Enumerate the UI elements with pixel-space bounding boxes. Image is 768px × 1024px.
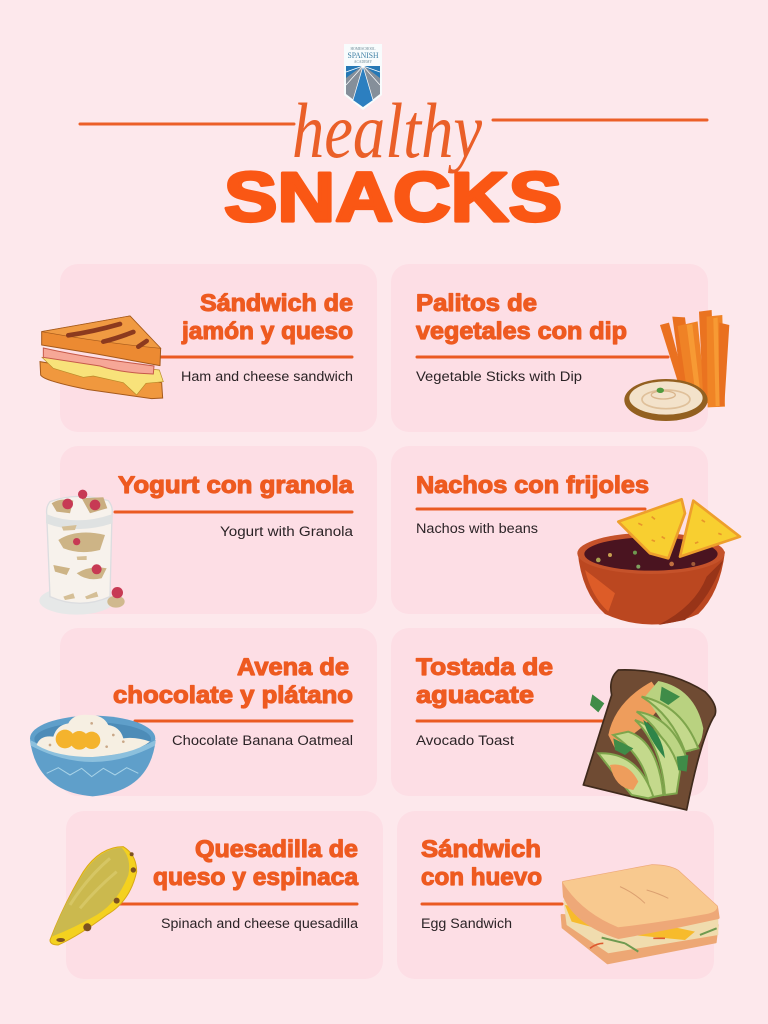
logo: Spanish academy shield: ACADEMY [354, 60, 372, 64]
heading: chocolate y plátano [113, 682, 353, 709]
translation: Spinach and cheese quesadilla [161, 916, 359, 931]
heading: Sándwich [421, 836, 541, 863]
icon: quesadilla [50, 847, 137, 945]
translation: Egg Sandwich [421, 916, 512, 931]
heading: Yogurt con granola [118, 472, 354, 499]
icon: egg sandwich [562, 866, 718, 963]
heading: Quesadilla de [195, 836, 358, 863]
heading [153, 836, 359, 891]
panel: avocado toast [391, 628, 716, 810]
icon: carrot sticks and dip [624, 310, 729, 421]
heading [421, 836, 542, 891]
translation: Avocado Toast [416, 733, 514, 748]
translation: Yogurt with Granola [220, 524, 354, 539]
heading: con huevo [421, 864, 542, 891]
panel: spinach and cheese quesadilla [50, 811, 383, 979]
icon: avocado toast [583, 670, 716, 810]
panel: yogurt with granola [39, 446, 377, 615]
heading: vegetales con dip [416, 318, 627, 345]
logo: Spanish academy shield [344, 44, 382, 110]
panel: chocolate banana oatmeal [30, 628, 377, 796]
heading: aguacate [416, 682, 534, 709]
panel: vegetable sticks with dip [391, 264, 729, 432]
heading [181, 290, 353, 345]
icon: yogurt jar [39, 490, 125, 615]
translation: Chocolate Banana Oatmeal [172, 733, 353, 748]
translation: Ham and cheese sandwich [181, 369, 353, 384]
title: healthy snacks: SNACKS [224, 158, 562, 236]
icon: toasted sandwich [40, 316, 163, 399]
icon: nachos and bean dip bowl [577, 499, 740, 625]
panel: egg sandwich [397, 811, 718, 979]
heading [416, 290, 627, 345]
icon: oatmeal bowl [30, 715, 156, 796]
heading: queso y espinaca [153, 864, 359, 891]
panel: ham and cheese sandwich [40, 264, 377, 432]
logo: Spanish academy shield: HOMESCHOOL [351, 47, 375, 51]
title: healthy snacks: healthy [292, 87, 482, 174]
heading: Sándwich de [200, 290, 353, 317]
panel: nachos with beans [391, 446, 740, 625]
translation: Vegetable Sticks with Dip [416, 369, 582, 384]
logo: Spanish academy shield: SPANISH [348, 51, 379, 60]
heading: Nachos con frijoles [416, 472, 649, 499]
title: healthy snacks [80, 87, 707, 236]
heading: Tostada de [416, 654, 553, 681]
heading [416, 654, 553, 709]
heading: Avena de [237, 654, 349, 681]
heading: jamón y queso [181, 318, 353, 345]
heading [113, 654, 353, 709]
heading: Palitos de [416, 290, 537, 317]
translation: Nachos with beans [416, 521, 538, 536]
